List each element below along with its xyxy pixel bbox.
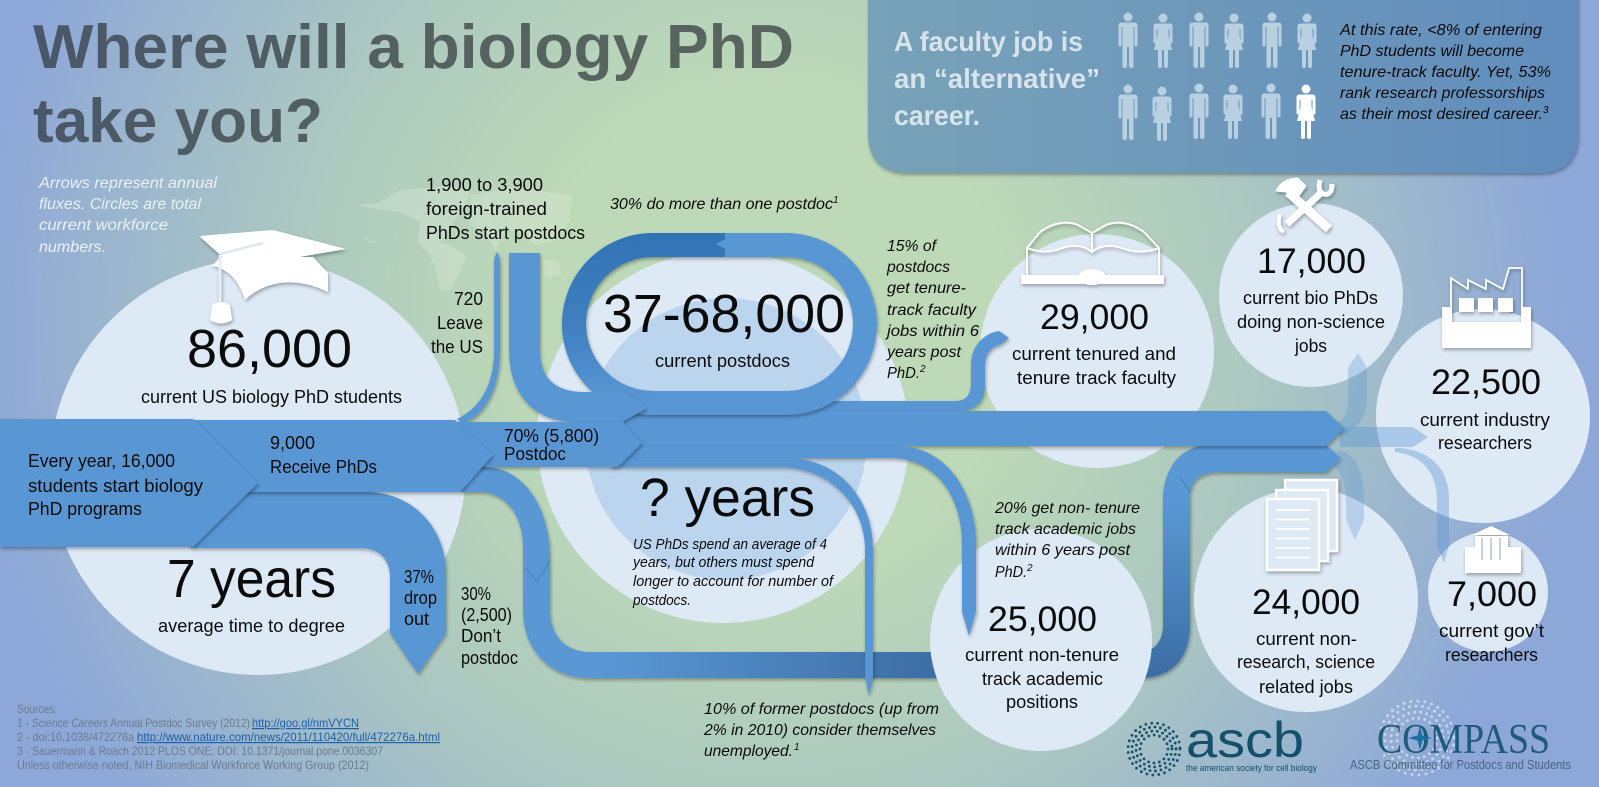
industry stats: researchers [1438, 433, 1532, 453]
unemployed note: 10% of former postdocs (up from [704, 701, 939, 718]
icon: graduation cap [199, 230, 346, 324]
postdoc stats [603, 284, 845, 371]
non-tenure stats: positions [1006, 692, 1078, 712]
foreign-trained text: PhDs start postdocs [426, 223, 585, 243]
logo: ascb: ascb [1186, 712, 1304, 768]
panel text: as their most desired career. [1340, 106, 1543, 123]
arrow: postdoc loop [574, 233, 865, 403]
PhD students stats: 86,000 [187, 319, 352, 379]
postdoc time stats: US PhDs spend an average of 4 [633, 536, 827, 553]
faculty stats: tenure track faculty [1017, 368, 1176, 388]
icon: hammer and wrench [1276, 178, 1332, 232]
panel text [1339, 22, 1551, 123]
sources: http://goo.gl/nmVYCN [252, 716, 359, 730]
tenure-track note: 15% of [887, 238, 938, 255]
don't postdoc text: (2,500) [461, 605, 512, 625]
title [33, 13, 794, 156]
logo: ascb [1128, 712, 1317, 775]
time to degree stat: 7 years [167, 549, 336, 609]
arrow: band to career fan-out [990, 445, 1341, 678]
tenure-track note: 2 [919, 364, 926, 375]
postdoc stats: 37-68,000 [603, 284, 845, 344]
note: non-tenure academic: 20% get non- tenure [994, 500, 1140, 517]
faculty stats [1012, 298, 1176, 388]
foreign-trained text [426, 175, 585, 243]
icon: row of people [1118, 12, 1316, 141]
entering students text: PhD programs [28, 499, 142, 519]
legend note: fluxes. Circles are total [39, 196, 202, 213]
arrow: faded to non-science jobs [1335, 353, 1367, 437]
entering students text [28, 451, 203, 519]
dropout text: 37% [404, 567, 434, 587]
non-science stats: doing non-science [1237, 312, 1385, 332]
receive PhDs text [270, 433, 377, 477]
note: non-tenure academic: track academic jobs [995, 521, 1136, 538]
don't postdoc text: 30% [461, 584, 491, 604]
tenure-track note: get tenure- [887, 280, 966, 297]
leave the US text: the US [431, 337, 483, 357]
non-tenure stats: track academic [982, 669, 1103, 689]
panel text: rank research professorships [1340, 85, 1545, 102]
circle: government [1428, 532, 1548, 652]
arrow: to faculty [780, 331, 1009, 411]
arrow: faded to non-research jobs [1335, 450, 1364, 540]
government stats: current gov’t [1439, 621, 1544, 641]
non-tenure stats [965, 600, 1119, 712]
non-tenure stats: current non-tenure [965, 645, 1119, 665]
legend note [38, 175, 218, 256]
circle: PhD students [50, 259, 466, 675]
icon: documents [1267, 480, 1337, 570]
non-science stats: jobs [1294, 336, 1327, 356]
non-research stats: related jobs [1259, 677, 1353, 697]
sources [17, 702, 440, 772]
sources: 3 - Sauermann & Roach 2012 PLOS ONE; DOI: 10.1371/journal.pone.0036307 [17, 744, 383, 758]
unemployed note [703, 701, 939, 760]
circle: non-science jobs [1219, 203, 1403, 387]
arrow: to unemployed [610, 458, 873, 696]
leave the US text: Leave [437, 313, 483, 333]
receive PhDs text: 9,000 [270, 433, 315, 453]
note: non-tenure academic: PhD. [995, 564, 1027, 581]
logo: COMPASS [1350, 701, 1571, 775]
dropout text: out [404, 609, 429, 629]
note: non-tenure academic [994, 500, 1140, 581]
icon: factory [1442, 268, 1531, 348]
arrow: receive PhDs [185, 420, 493, 492]
postdoc time stats: years, but others must spend [632, 554, 815, 571]
tenure-track note [885, 238, 979, 382]
foreign-trained text: foreign-trained [426, 199, 547, 219]
industry stats [1420, 363, 1550, 453]
foreign-trained text: 1,900 to 3,900 [426, 175, 543, 195]
don't postdoc text: Don’t [461, 626, 501, 646]
note: non-tenure academic: 2 [1026, 563, 1033, 574]
arrow: foreign-trained PhDs [509, 253, 647, 422]
legend note: numbers. [39, 239, 106, 256]
70% postdoc text: Postdoc [504, 444, 566, 464]
70% postdoc text [504, 426, 599, 464]
icon: open book [1021, 223, 1164, 285]
non-science stats [1237, 242, 1385, 356]
sources: 1 - Science Careers Annual Postdoc Survey (2012) [17, 716, 250, 730]
don't postdoc text: postdoc [461, 648, 518, 668]
non-research stats: research, science [1237, 652, 1375, 672]
circle: non-research science jobs [1194, 488, 1418, 712]
entering students text: Every year, 16,000 [28, 451, 175, 471]
faculty stats: current tenured and [1012, 344, 1176, 364]
arrow: main postdoc to industry [600, 411, 1344, 446]
title: Where will a biology PhD [33, 13, 794, 82]
circle: postdocs outer [537, 251, 909, 623]
PhD students stats [141, 319, 402, 407]
sources: Sources: [17, 702, 57, 716]
more than one postdoc note: 30% do more than one postdoc [610, 196, 833, 213]
tenure-track note: jobs within 6 [885, 323, 979, 340]
dropout text [404, 567, 437, 629]
tenure-track note: years post [886, 344, 962, 361]
tenure-track note: postdocs [886, 259, 950, 276]
dropout text: drop [404, 588, 437, 608]
non-research stats: current non- [1256, 629, 1357, 649]
legend note: Arrows represent annual [38, 175, 218, 192]
time to degree stat: average time to degree [158, 616, 345, 636]
PhD students stats: current US biology PhD students [141, 387, 402, 407]
sources: 2 - doi:10.1038/472276a [17, 730, 134, 744]
government stats [1439, 575, 1544, 665]
faint world map [358, 186, 572, 290]
postdoc time stats: longer to account for number of [633, 573, 835, 590]
non-science stats: 17,000 [1257, 242, 1366, 281]
circle: non-tenure academic [930, 529, 1152, 751]
entering students text: students start biology [28, 476, 203, 496]
panel text: PhD students will become [1340, 43, 1524, 60]
circle: postdocs inner [585, 298, 867, 580]
arrow: entering students [0, 419, 258, 547]
arrow: faded to government [1395, 448, 1449, 563]
arrow: leave the US [457, 252, 500, 423]
time to degree stat [158, 549, 345, 636]
non-science stats: current bio PhDs [1243, 288, 1378, 308]
circle: industry [1376, 309, 1590, 523]
sources: Unless otherwise noted, NIH Biomedical Workforce Working Group (2012) [17, 758, 369, 772]
faculty stats: 29,000 [1040, 298, 1149, 337]
non-research stats: 24,000 [1252, 583, 1360, 622]
postdoc time stats: ? years [640, 468, 815, 528]
postdoc time stats: postdocs. [632, 592, 691, 609]
receive PhDs text: Receive PhDs [270, 457, 377, 477]
unemployed note: unemployed. [704, 743, 793, 760]
logo: COMPASS: COMPASS [1377, 717, 1550, 763]
postdoc time stats [632, 468, 835, 609]
panel heading: an “alternative” [894, 63, 1100, 94]
title: take you? [33, 87, 323, 156]
leave the US text [431, 289, 483, 357]
arrow: to non-tenure academic [620, 446, 976, 636]
note: non-tenure academic: within 6 years post [995, 542, 1131, 559]
non-tenure stats: 25,000 [988, 600, 1097, 639]
more than one postdoc note: 1 [833, 195, 839, 206]
don't postdoc text [461, 584, 518, 668]
government stats: 7,000 [1447, 575, 1537, 614]
tenure-track note: PhD. [887, 365, 920, 382]
panel text: At this rate, <8% of entering [1339, 22, 1542, 39]
government stats: researchers [1445, 645, 1538, 665]
panel text: tenure-track faculty. Yet, 53% [1340, 64, 1551, 81]
panel: faculty job [868, 0, 1578, 173]
logo: ascb: the american society for cell biology [1186, 763, 1317, 773]
panel heading [894, 26, 1100, 131]
legend note: current workforce [39, 217, 168, 234]
unemployed note: 2% in 2010) consider themselves [703, 722, 936, 739]
circle: faculty [980, 234, 1214, 468]
sources: http://www.nature.com/news/2011/110420/full/472276a.html [137, 730, 440, 744]
panel heading: career. [894, 100, 980, 131]
industry stats: 22,500 [1431, 363, 1541, 402]
panel heading: A faculty job is [894, 26, 1083, 57]
arrow: don't postdoc band [460, 467, 1000, 678]
non-research stats [1237, 583, 1375, 697]
icon: government building [1465, 526, 1521, 573]
unemployed note: 1 [794, 742, 800, 753]
tenure-track note: track faculty [887, 302, 977, 319]
postdoc stats: current postdocs [655, 351, 790, 371]
70% postdoc text: 70% (5,800) [504, 426, 599, 446]
leave the US text: 720 [454, 289, 483, 309]
arrow: faded to industry [1340, 427, 1428, 447]
panel text: 3 [1543, 105, 1549, 116]
arrow: 70% postdoc [440, 422, 642, 467]
arrow: dropout [190, 492, 446, 674]
industry stats: current industry [1420, 410, 1550, 430]
